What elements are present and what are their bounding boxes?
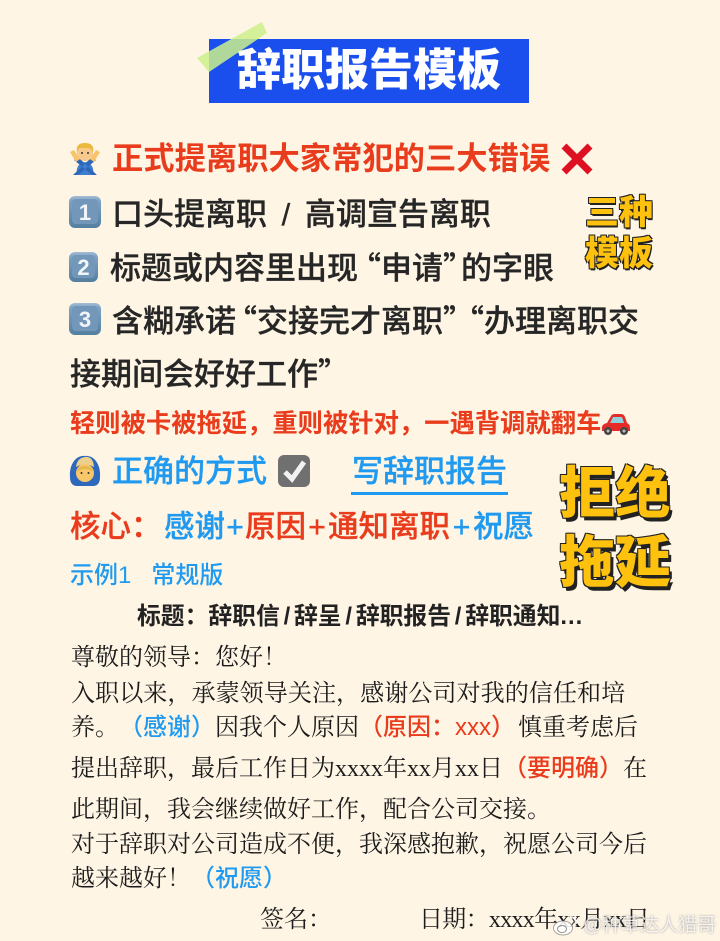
sticker: three templates: 模板 xyxy=(585,235,653,273)
title banner xyxy=(209,39,529,103)
sticker: three templates xyxy=(584,194,654,273)
icon: keycap 2: 2 xyxy=(77,255,90,280)
mistake 3 second line: 接期间会好好工作” xyxy=(70,349,336,394)
mistake 3 first line: 含糊承诺“交接完才离职”“办理离职交 xyxy=(112,296,639,341)
icon: person gesturing OK xyxy=(70,456,100,486)
letter: line 3: 提出辞职，最后工作日为xxxx年xx月xx日（要明确）在 xyxy=(71,755,647,782)
sticker: refuse delay: 拒绝 xyxy=(559,462,671,525)
sticker: three templates: 三种 xyxy=(585,194,653,232)
letter: signature: 签名： xyxy=(260,907,332,933)
icon: keycap 1 xyxy=(69,196,101,228)
red heading: three mistakes: 正式提离职大家常犯的三大错误 xyxy=(112,141,550,176)
blue heading: correct way: 正确的方式 xyxy=(112,454,267,489)
subject line: 标题：辞职信/辞呈/辞职报告/辞职通知... xyxy=(137,603,583,630)
letter: greeting: 尊敬的领导：您好！ xyxy=(71,645,287,671)
underline xyxy=(351,492,508,495)
icon: keycap 1: 1 xyxy=(79,200,91,225)
blue heading: write resignation report: 写辞职报告 xyxy=(352,454,507,489)
core formula: 核心：感谢+原因+通知离职+祝愿 xyxy=(70,510,534,544)
mistake 2: 标题或内容里出现“申请”的字眼 xyxy=(110,243,554,288)
green tape decoration xyxy=(197,22,267,72)
example label: 示例1 常规版 xyxy=(70,562,223,589)
letter: line 4: 此期间，我会继续做好工作，配合公司交接。 xyxy=(71,797,551,823)
letter: line 2: 养。（感谢）因我个人原因（原因：xxx）慎重考虑后 xyxy=(71,714,638,741)
icon: keycap 3 xyxy=(69,303,101,335)
icon: person crossing arms xyxy=(70,143,100,175)
sticker: refuse delay xyxy=(559,462,674,594)
title text: 辞职报告模板 xyxy=(237,46,501,95)
icon: check box xyxy=(278,455,310,487)
watermark: @种草达人猎哥 xyxy=(583,915,716,936)
icon: keycap 2 xyxy=(69,252,98,282)
letter: line 6: 越来越好！（祝愿） xyxy=(71,865,287,892)
icon: red car xyxy=(602,414,630,435)
letter: date: 日期：xxxx年xx月xx日 xyxy=(419,907,649,933)
letter: line 5: 对于辞职对公司造成不便，我深感抱歉，祝愿公司今后 xyxy=(71,832,647,858)
mistake 1: 口头提离职 / 高调宣告离职 xyxy=(112,197,491,232)
letter: line 1: 入职以来，承蒙领导关注，感谢公司对我的信任和培 xyxy=(71,681,625,707)
red warning line: 轻则被卡被拖延，重则被针对，一遇背调就翻车 xyxy=(70,410,601,438)
sticker: refuse delay: 拖延 xyxy=(559,531,671,594)
icon: weibo logo xyxy=(553,916,577,936)
icon: keycap 3: 3 xyxy=(79,307,91,332)
icon: red cross xyxy=(562,144,592,174)
